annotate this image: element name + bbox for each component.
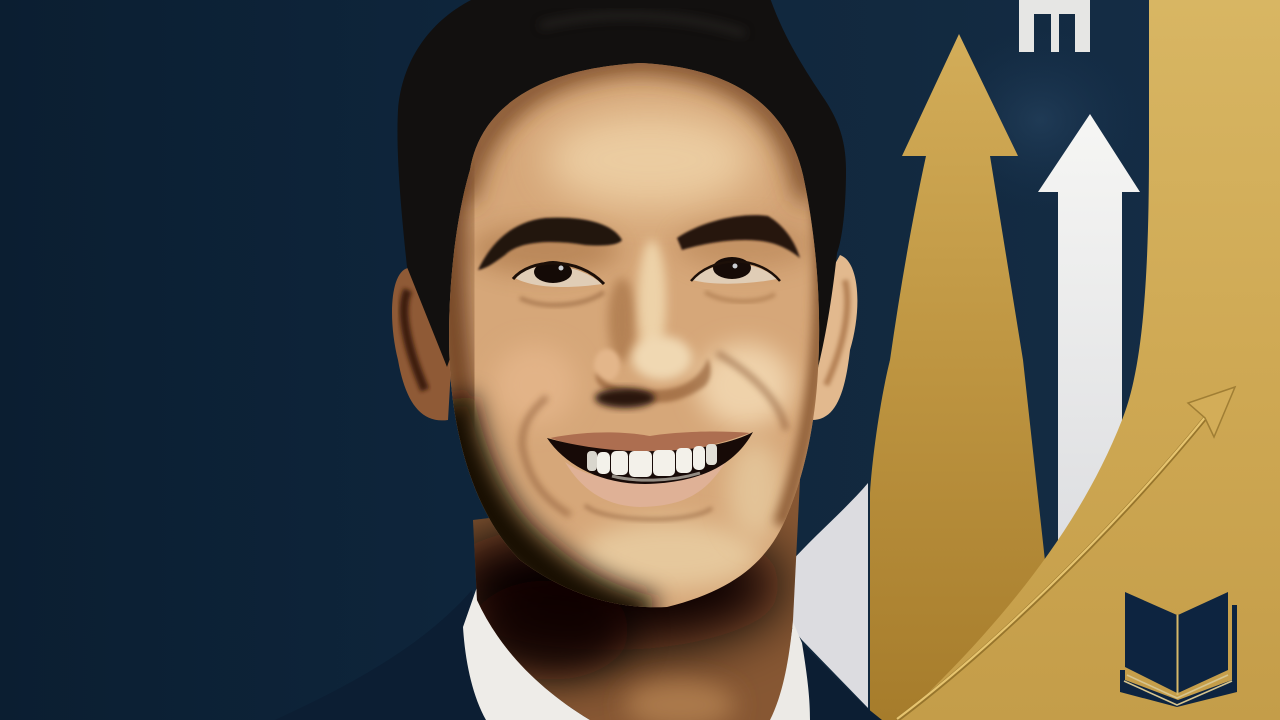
upper lip: [550, 432, 750, 452]
side tone: [449, 170, 465, 420]
smile lines: [522, 353, 786, 515]
arrow: lower white wedge: [790, 483, 868, 708]
teeth: [587, 444, 717, 477]
hairline shadow: [462, 60, 810, 200]
eyebrows: [478, 215, 800, 270]
illustration: portrait with growth arrows: [392, 0, 1280, 720]
right cheek highlight: [697, 343, 793, 427]
icon: open book: [1120, 592, 1237, 707]
chin highlight: [580, 521, 760, 589]
forehead highlight: [545, 112, 755, 208]
arrow: tall gold arrow: [870, 34, 1046, 720]
face: [440, 55, 830, 622]
figure: man: [392, 0, 882, 720]
neck: [473, 480, 800, 720]
mouth: [547, 432, 753, 519]
eyes: [513, 257, 780, 305]
nose: [594, 240, 711, 408]
brow shade: [470, 225, 620, 275]
arrow: thin gold growth line: [897, 387, 1235, 720]
mouth interior: [547, 432, 753, 484]
suit: [275, 590, 882, 720]
right edge tone: [780, 200, 820, 525]
hair: [397, 0, 846, 372]
left jaw shadow: [448, 400, 650, 622]
panel: gold curved sweep: [900, 0, 1280, 720]
lower lip: [565, 458, 728, 507]
arrow: white arrow: [1038, 114, 1140, 570]
collar: [463, 587, 810, 720]
ears: [392, 255, 857, 420]
left cheek tone: [497, 348, 573, 422]
icon: building at top: [1019, 0, 1090, 52]
